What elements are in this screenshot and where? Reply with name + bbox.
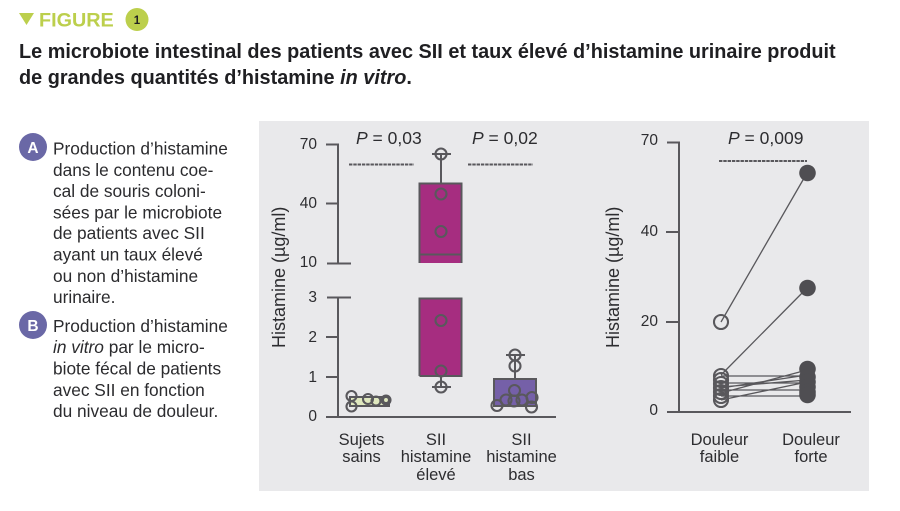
legend A text: sées par le microbiote — [53, 202, 222, 222]
y axis: 0 — [649, 402, 658, 419]
legend A text: de patients avec SII — [53, 223, 205, 243]
y axis: 10 — [300, 254, 317, 271]
y axis: 70 — [641, 132, 658, 149]
box: SII histamine eleve — [420, 148, 462, 392]
x axis labels: faible — [700, 448, 739, 466]
y axis: 1 — [308, 369, 317, 386]
legend B text: in vitro par le micro- — [53, 337, 205, 357]
y axis title: Histamine (µg/ml) — [269, 207, 289, 348]
p value 0,02 — [468, 128, 538, 164]
y axis: 0 — [308, 408, 317, 425]
box: SII histamine bas — [492, 350, 538, 412]
x axis labels: SII — [426, 431, 446, 449]
x axis labels: histamine — [401, 448, 471, 466]
x axis labels: Sujets — [339, 431, 384, 449]
icon: triangle marker — [19, 13, 34, 25]
p value 0,03: P = 0,03 — [356, 128, 422, 148]
legend A text: urinaire. — [53, 287, 115, 307]
legend A text: ayant un taux élevé — [53, 244, 203, 264]
box: sujets sains — [346, 391, 390, 412]
open dots: douleur faible — [714, 315, 728, 407]
x axis labels: SII — [511, 431, 532, 449]
title: de grandes quantités d’histamine in vitro. — [19, 67, 412, 89]
p value 0,02: P = 0,02 — [472, 128, 538, 148]
legend B — [19, 311, 228, 421]
p value 0,009: P = 0,009 — [728, 128, 803, 148]
legend B text: avec SII en fonction — [53, 380, 205, 400]
y axis — [300, 136, 556, 425]
y axis — [641, 132, 851, 419]
figure heading — [19, 8, 148, 32]
legend B text: biote fécal de patients — [53, 358, 221, 378]
title: Le microbiote intestinal des patients avec SII et taux élevé d’histamine urinaire produit — [19, 41, 836, 63]
legend A text: cal de souris coloni- — [53, 181, 206, 201]
x axis labels: histamine — [486, 448, 557, 466]
y axis: 40 — [641, 223, 658, 240]
x axis labels — [339, 431, 557, 484]
legend A text: dans le contenu coe- — [53, 160, 213, 180]
legend A text: Production d’histamine — [53, 138, 228, 158]
panel A: box plot chart — [269, 128, 557, 484]
p value 0,009 — [719, 128, 807, 161]
p value 0,03 — [349, 128, 422, 164]
figure label: FIGURE — [39, 10, 114, 32]
chart panel background — [259, 121, 869, 491]
paired lines — [721, 173, 807, 400]
y axis title: Histamine (µg/ml) — [603, 207, 623, 348]
y axis: 2 — [308, 329, 317, 346]
y axis: 3 — [308, 289, 317, 306]
y axis: 20 — [641, 313, 658, 330]
legend B text: Production d’histamine — [53, 316, 228, 336]
y axis: 70 — [300, 136, 317, 153]
x axis labels: Douleur — [782, 431, 840, 449]
filled dots: douleur forte — [799, 165, 816, 403]
badge B — [19, 311, 47, 339]
badge A: A — [27, 140, 39, 157]
x axis labels — [691, 431, 840, 466]
figure number badge: 1 — [134, 15, 141, 27]
badge A — [19, 133, 47, 161]
panel B: paired dot plot chart — [603, 128, 851, 466]
legend B text: du niveau de douleur. — [53, 401, 218, 421]
x axis labels: forte — [794, 448, 828, 466]
x axis labels: bas — [508, 466, 535, 484]
legend A — [19, 133, 228, 307]
x axis labels: sains — [342, 448, 381, 466]
badge B: B — [27, 318, 39, 335]
y axis: 40 — [300, 195, 317, 212]
x axis labels: Douleur — [691, 431, 749, 449]
legend A text: ou non d’histamine — [53, 266, 198, 286]
x axis labels: élevé — [416, 466, 456, 484]
